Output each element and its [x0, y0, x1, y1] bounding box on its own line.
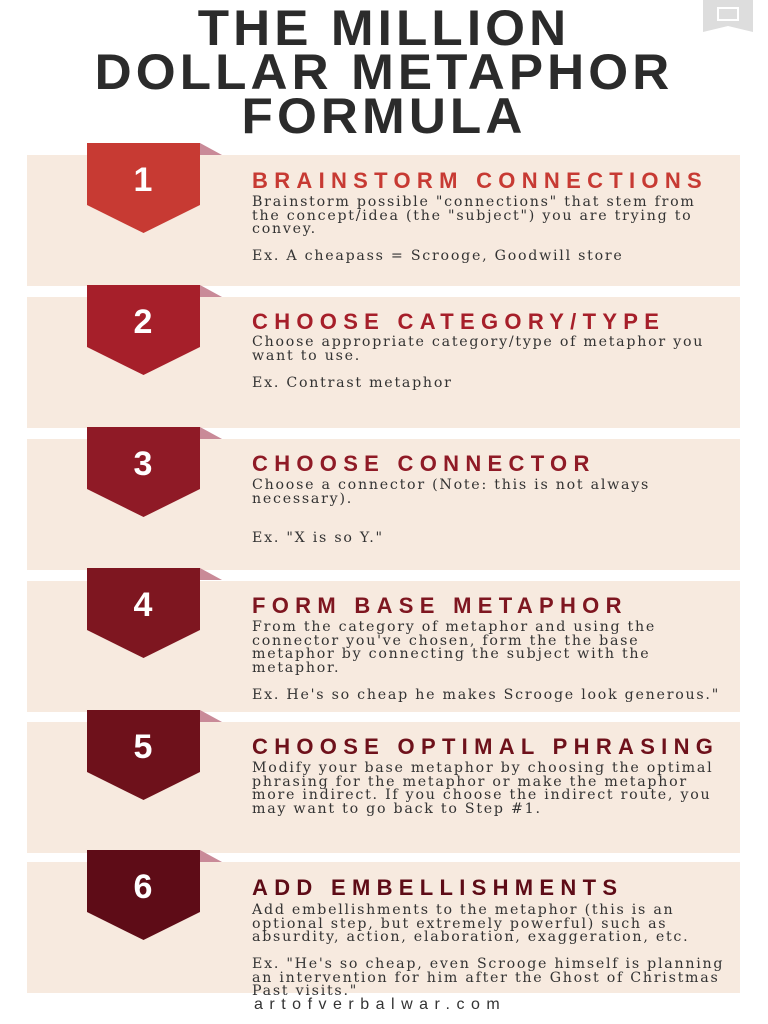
- heading: ADD EMBELLISHMENTS: [252, 875, 623, 900]
- text: Past visits.": [252, 983, 358, 999]
- heading: CHOOSE CONNECTOR: [252, 451, 596, 476]
- icon: ribbon 3: 3: [134, 445, 152, 483]
- panel: step 6: [27, 850, 740, 999]
- text: want to use.: [252, 348, 361, 364]
- title: FORMULA: [242, 88, 526, 144]
- text: metaphor by connecting the subject with the: [252, 646, 650, 662]
- text: Choose appropriate category/type of metaphor you: [252, 334, 704, 350]
- text: Ex. Contrast metaphor: [252, 374, 453, 390]
- text: Ex. A cheapass = Scrooge, Goodwill store: [252, 248, 624, 264]
- heading: CHOOSE OPTIMAL PHRASING: [252, 734, 719, 759]
- text: Ex. "X is so Y.": [252, 530, 384, 546]
- text: Brainstorm possible "connections" that stem from: [252, 194, 696, 210]
- text: [252, 477, 650, 546]
- text: [252, 760, 713, 816]
- text: convey.: [252, 221, 317, 237]
- icon: ribbon 5: 5: [134, 728, 152, 766]
- icon: ribbon 2: [87, 285, 222, 375]
- text: more indirect. If you choose the indirect route, you: [252, 787, 711, 803]
- text: phrasing for the metaphor or make the metaphor: [252, 774, 688, 790]
- text: optional step, but extremely powerful) such as: [252, 916, 667, 932]
- icon: ribbon 3: [87, 427, 222, 517]
- icon: ribbon 2: 2: [134, 303, 152, 341]
- icon: ribbon 4: 4: [134, 586, 153, 624]
- icon: ribbon 1: 1: [134, 161, 152, 199]
- title: THE MILLION: [198, 0, 570, 56]
- title: [95, 0, 673, 144]
- panel: step 1: [27, 143, 740, 286]
- panel: step 3: [27, 427, 740, 570]
- heading: FORM BASE METAPHOR: [252, 593, 628, 618]
- text: [252, 194, 696, 264]
- footer: artofverbalwar.com: [254, 996, 506, 1013]
- panel: step 2: [27, 285, 740, 428]
- heading: CHOOSE CATEGORY/TYPE: [252, 309, 665, 334]
- text: an intervention for him after the Ghost of Christmas: [252, 970, 720, 986]
- icon: ribbon 1: [87, 143, 222, 233]
- text: the concept/idea (the "subject") you are trying to: [252, 208, 692, 224]
- text: metaphor.: [252, 660, 340, 676]
- text: [252, 902, 724, 999]
- text: From the category of metaphor and using the: [252, 619, 656, 635]
- icon: ribbon 4: [87, 568, 222, 658]
- text: Modify your base metaphor by choosing the optimal: [252, 760, 713, 776]
- icon: ribbon 5: [87, 710, 222, 800]
- text: [252, 334, 704, 390]
- panel: step 5: [27, 710, 740, 853]
- text: absurdity, action, elaboration, exaggeration, etc.: [252, 929, 689, 945]
- panel: step 4: [27, 568, 740, 712]
- text: Choose a connector (Note: this is not always: [252, 477, 650, 493]
- icon: ribbon 6: [87, 850, 222, 940]
- icon: ribbon 6: 6: [134, 868, 152, 906]
- text: Ex. "He's so cheap, even Scrooge himself is planning: [252, 956, 724, 972]
- text: connector you've chosen, form the the base: [252, 632, 639, 648]
- text: necessary).: [252, 490, 353, 506]
- text: Add embellishments to the metaphor (this is an: [252, 902, 674, 918]
- logo: [703, 0, 753, 32]
- text: Ex. He's so cheap he makes Scrooge look generous.": [252, 686, 720, 702]
- heading: BRAINSTORM CONNECTIONS: [252, 168, 708, 193]
- title: DOLLAR METAPHOR: [95, 44, 673, 100]
- text: may want to go back to Step #1.: [252, 800, 542, 816]
- text: [252, 619, 720, 702]
